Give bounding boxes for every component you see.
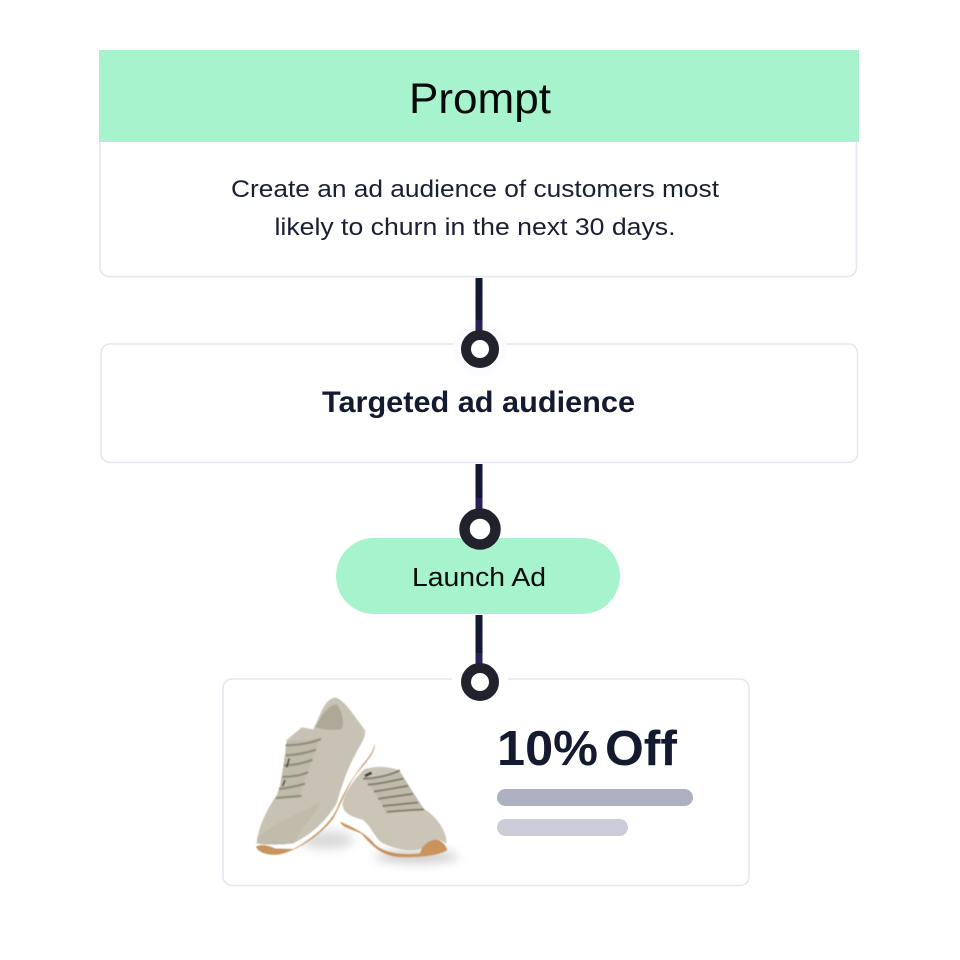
heading: Prompt: Prompt (409, 75, 551, 123)
panel: targeted ad audience (101, 344, 858, 462)
offer: 10% off: 10% (497, 722, 598, 776)
connector: audience to launch (464, 464, 496, 544)
connector: prompt to audience (453, 278, 507, 376)
prompt text: Create an ad audience of customers most (231, 176, 719, 203)
right shoe upper (343, 767, 447, 850)
left shoe upper (257, 697, 365, 845)
label: targeted ad audience: Targeted ad audience (322, 386, 635, 419)
panel: prompt (99, 50, 859, 276)
offer: 10% off: Off (605, 722, 678, 776)
offer: 10% off (497, 722, 678, 776)
prompt text: likely to churn in the next 30 days. (274, 214, 676, 241)
icon: shoes (256, 697, 458, 862)
prompt text (231, 176, 719, 241)
placeholder line 2 (497, 819, 628, 836)
left shoe sole (256, 737, 374, 853)
right shoe sole (340, 822, 447, 857)
placeholder line 1 (497, 789, 693, 806)
panel: ad card (223, 679, 749, 886)
connector: launch to ad card (452, 615, 508, 696)
button: launch ad: Launch Ad (412, 564, 546, 592)
button: launch ad (336, 538, 620, 614)
prompt header band (99, 50, 859, 142)
